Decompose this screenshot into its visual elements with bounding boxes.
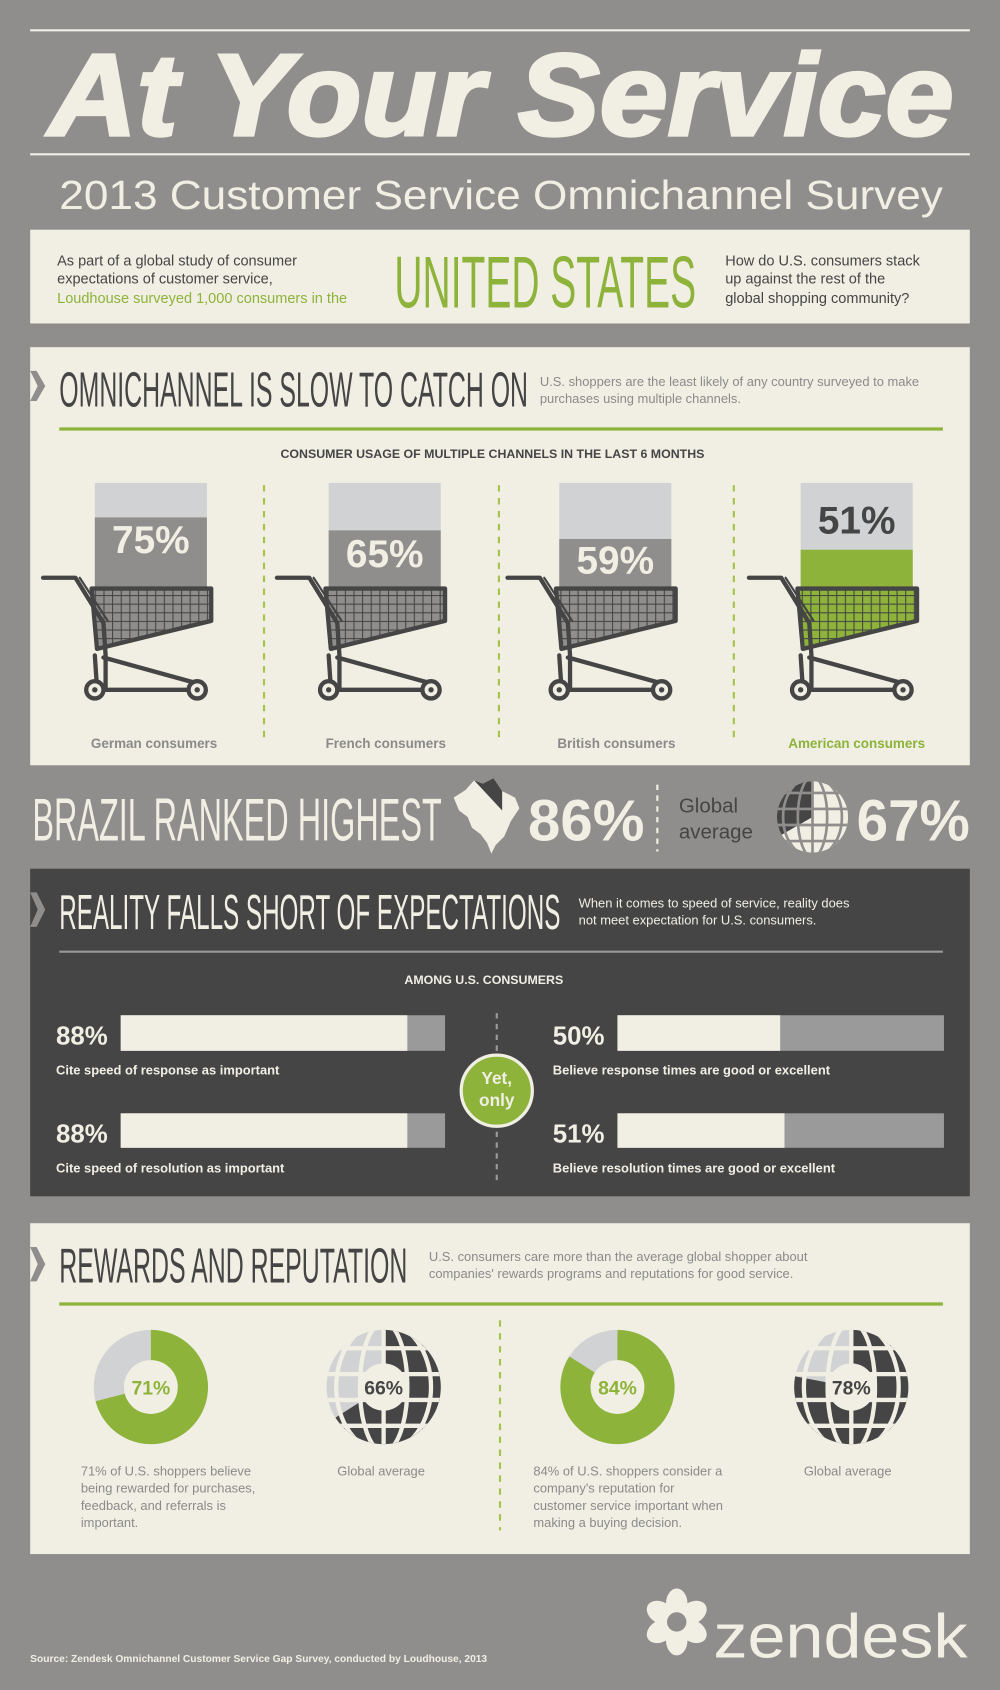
cart: French: French consumers: [326, 736, 446, 751]
bar: resolution important: Cite speed of resolution as important: [56, 1161, 285, 1176]
brazil row: [32, 777, 970, 857]
global average label: [679, 795, 753, 844]
caption global 78: Global average: [804, 1463, 892, 1478]
panel: intro: [30, 230, 970, 323]
intro right text: How do U.S. consumers stack: [725, 253, 921, 269]
caption 71%: being rewarded for purchases,: [81, 1481, 255, 1496]
caption 84%: 84% of U.S. shoppers consider a: [533, 1463, 723, 1478]
intro right text: global shopping community?: [725, 291, 909, 307]
caption 84%: making a buying decision.: [533, 1515, 682, 1530]
cart: German: [43, 483, 217, 751]
donut: 84%: 84%: [598, 1378, 637, 1400]
icon: brazil map: [454, 778, 519, 854]
global average label: average: [679, 821, 753, 844]
globe: 66%: 66%: [364, 1378, 403, 1400]
bar: resolution important: 88%: [56, 1120, 108, 1148]
callout: yet only: only: [479, 1090, 515, 1110]
bar: response important: 88%: [56, 1022, 108, 1050]
bar: response good: [553, 1015, 944, 1078]
logo: zendesk: [642, 1589, 968, 1672]
cart: British: British consumers: [557, 736, 675, 751]
cart: German: 75%: [112, 519, 190, 562]
UNITED STATES: UNITED STATES: [394, 241, 696, 323]
bar: resolution good: 51%: [553, 1120, 605, 1148]
heading: REWARDS AND REPUTATION: [59, 1237, 407, 1293]
caption 71%: [81, 1463, 255, 1530]
intro right text: [725, 253, 921, 307]
bar: response good: 50%: [553, 1022, 605, 1050]
global average label: Global: [679, 795, 738, 818]
cart: British: 59%: [576, 539, 654, 582]
callout: yet only: Yet,: [481, 1068, 512, 1088]
icon: globe 67%: [777, 781, 848, 852]
caption 84%: company's reputation for: [533, 1481, 675, 1496]
intro left text: Loudhouse surveyed 1,000 consumers in the: [57, 291, 347, 307]
caption 84%: [533, 1463, 723, 1530]
intro right text: up against the rest of the: [725, 272, 885, 288]
bar: response good: Believe response times are good or excellent: [553, 1063, 831, 1078]
cart: British: [508, 483, 676, 751]
cart: American: [749, 483, 925, 751]
cart: American: 51%: [818, 500, 895, 543]
intro left text: As part of a global study of consumer: [57, 253, 297, 269]
subtext: [579, 896, 849, 928]
intro left text: expectations of customer service,: [57, 272, 273, 288]
subtext: When it comes to speed of service, reality does: [579, 896, 849, 911]
chart title: CONSUMER USAGE OF MULTIPLE CHANNELS IN THE LAST 6 MONTHS: [280, 447, 704, 461]
caption 71%: feedback, and referrals is: [81, 1498, 226, 1513]
globe: 78%: 78%: [832, 1378, 871, 1400]
caption 71%: important.: [81, 1515, 138, 1530]
chart title: AMONG U.S. CONSUMERS: [404, 973, 563, 987]
title: At Your Service: [45, 30, 954, 160]
brazil heading: BRAZIL RANKED HIGHEST: [32, 786, 442, 854]
subtext: U.S. consumers care more than the average global shopper about: [429, 1249, 808, 1264]
bar: resolution important: [56, 1113, 445, 1176]
donut: 71%: [94, 1330, 208, 1444]
cart: French: 65%: [346, 533, 424, 576]
caption 84%: customer service important when: [533, 1498, 723, 1513]
bar: resolution good: [553, 1113, 944, 1176]
callout: yet only: [461, 1055, 532, 1126]
header: [30, 30, 970, 218]
panel: reality: [30, 869, 970, 1196]
panel: omnichannel: [30, 347, 970, 765]
heading: OMNICHANNEL IS SLOW TO CATCH ON: [59, 361, 528, 417]
bar: resolution good: Believe resolution times are good or excellent: [553, 1161, 836, 1176]
67%: 67%: [857, 789, 970, 854]
globe: 66%: [326, 1330, 441, 1444]
logo: zendesk: zendesk: [713, 1601, 968, 1671]
subtext: purchases using multiple channels.: [540, 391, 741, 406]
donut: 84%: [560, 1330, 675, 1444]
caption global 66: Global average: [337, 1463, 425, 1478]
subtitle: 2013 Customer Service Omnichannel Survey: [59, 172, 943, 218]
source: Source: Zendesk Omnichannel Customer Service Gap Survey, conducted by Loudhouse, 2013: [30, 1654, 487, 1665]
86%: 86%: [528, 789, 644, 854]
cart: French: [277, 483, 446, 751]
subtext: companies' rewards programs and reputations for good service.: [429, 1266, 793, 1281]
subtext: not meet expectation for U.S. consumers.: [579, 913, 816, 928]
cart: American: American consumers: [788, 736, 925, 751]
cart: German: German consumers: [91, 736, 217, 751]
intro left text: [57, 253, 347, 307]
bar: response important: [56, 1015, 445, 1078]
subtext: [540, 374, 919, 406]
panel: rewards: [30, 1223, 970, 1554]
caption 71%: 71% of U.S. shoppers believe: [81, 1463, 251, 1478]
subtext: U.S. shoppers are the least likely of any country surveyed to make: [540, 374, 919, 389]
globe: 78%: [794, 1330, 908, 1444]
bar: response important: Cite speed of response as important: [56, 1063, 280, 1078]
subtext: [429, 1249, 808, 1281]
donut: 71%: 71%: [131, 1378, 170, 1400]
